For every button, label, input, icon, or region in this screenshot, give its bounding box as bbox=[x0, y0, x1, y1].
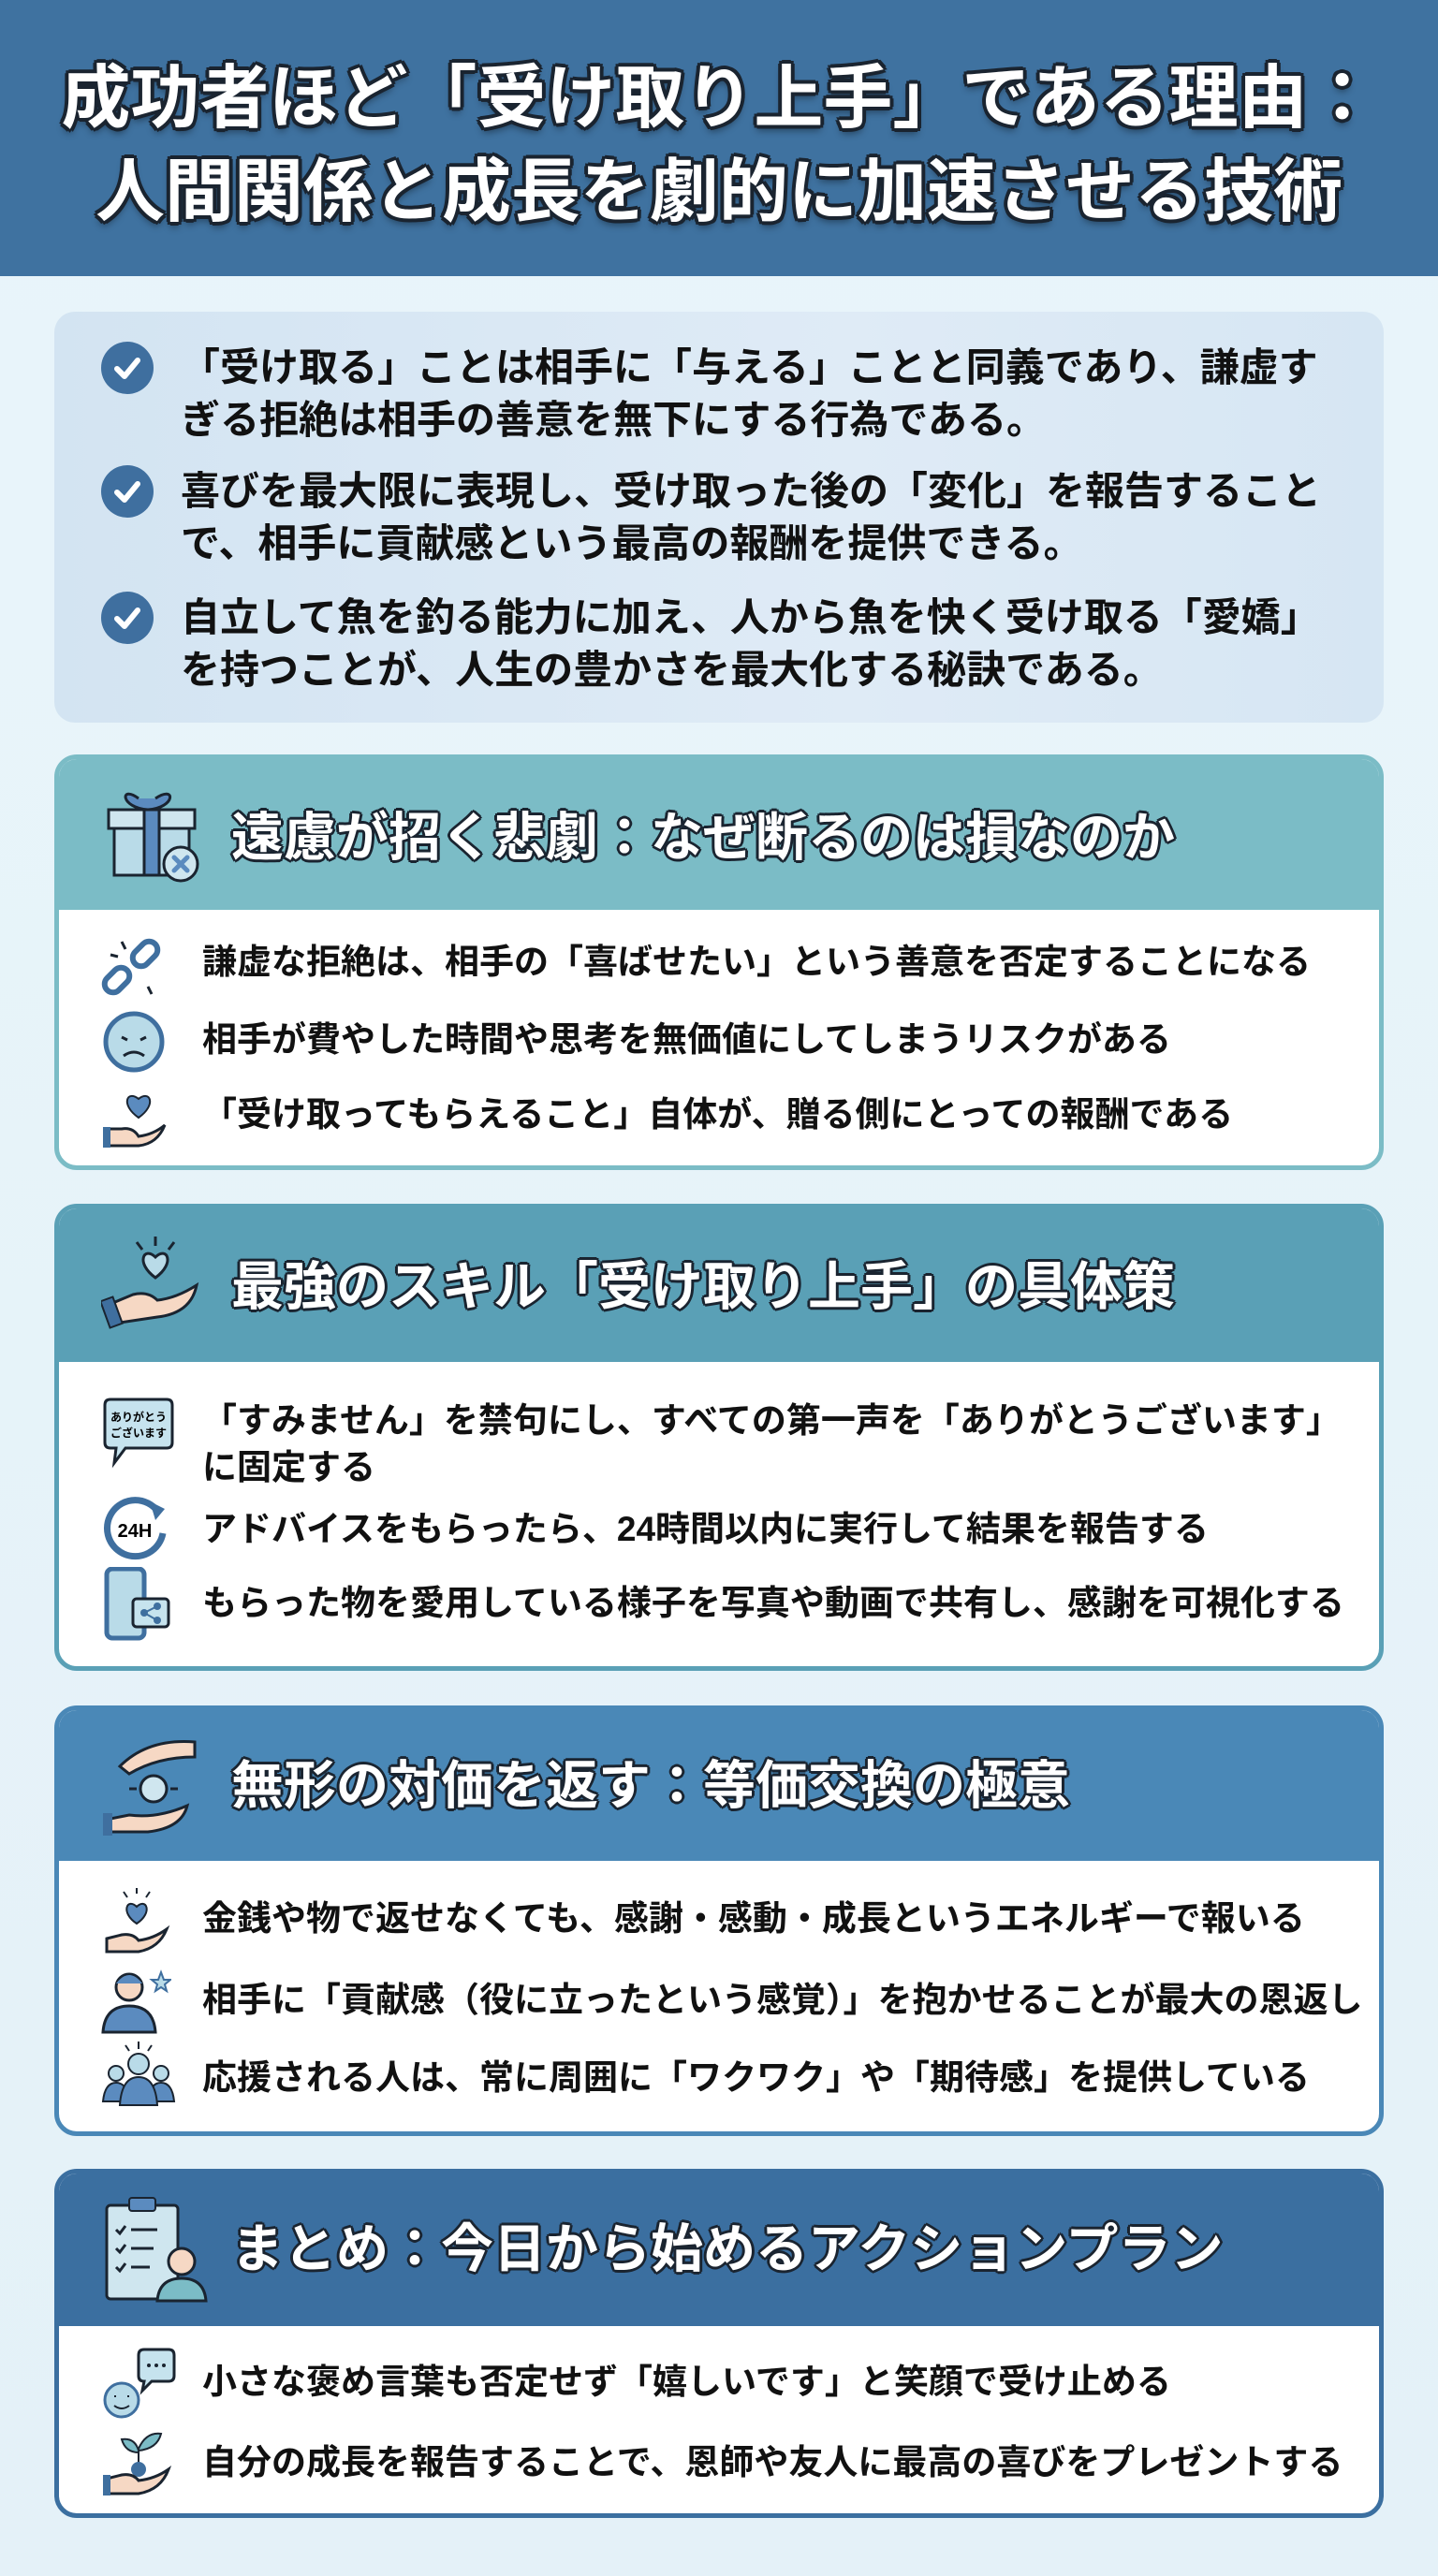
summary point 3 bbox=[181, 595, 1320, 692]
icon: sprout on hand bbox=[103, 2432, 171, 2496]
item 3: 応援される人は、常に周囲に「ワクワク」や「期待感」を提供している bbox=[202, 2058, 1310, 2097]
item 1: 金銭や物で返せなくても、感謝・感動・成長というエネルギーで報いる bbox=[202, 1899, 1305, 1938]
summary point 2 bbox=[181, 469, 1321, 565]
icon: gift with x bbox=[107, 792, 198, 882]
icon: clipboard with person bbox=[105, 2197, 208, 2303]
item 3: 「受け取ってもらえること」自体が、贈る側にとっての報酬である bbox=[202, 1095, 1233, 1134]
icon: speech bubble thanks bbox=[103, 1398, 174, 1468]
panel title: 遠慮が招く悲劇：なぜ断るのは損なのか bbox=[231, 808, 1175, 867]
icon: group of people bbox=[101, 2042, 176, 2106]
check icon 1 bbox=[101, 342, 154, 394]
item 2: 相手に「貢献感（役に立ったという感覚）」を抱かせることが最大の恩返し bbox=[202, 1981, 1363, 2019]
check icon 2 bbox=[101, 465, 154, 518]
icon: broken chain bbox=[101, 938, 161, 996]
summary point 1 bbox=[181, 345, 1318, 442]
icon: smile and speech bubble bbox=[103, 2348, 176, 2419]
summary point 1: ぎる拒絶は相手の善意を無下にする行為である。 bbox=[181, 398, 1046, 442]
item 2: 自分の成長を報告することで、恩師や友人に最高の喜びをプレゼントする bbox=[202, 2443, 1343, 2481]
item 1 bbox=[202, 1401, 1341, 1486]
icon: person with star bbox=[101, 1969, 171, 2033]
summary point 3: を持つことが、人生の豊かさを最大化する秘訣である。 bbox=[181, 648, 1163, 692]
icon: 24h clock bbox=[104, 1497, 167, 1559]
title line 2: 人間関係と成長を劇的に加速させる技術 bbox=[95, 153, 1343, 230]
summary point 3: 自立して魚を釣る能力に加え、人から魚を快く受け取る「愛嬌」 bbox=[181, 595, 1320, 639]
panel title: 無形の対価を返す：等価交換の極意 bbox=[231, 1756, 1070, 1815]
summary point 1: 「受け取る」ことは相手に「与える」ことと同義であり、謙虚す bbox=[181, 345, 1318, 389]
icon: sad face bbox=[103, 1011, 165, 1073]
item 2: アドバイスをもらったら、24時間以内に実行して結果を報告する bbox=[202, 1510, 1209, 1548]
item 1: に固定する bbox=[202, 1448, 375, 1486]
panel: concrete skills bbox=[54, 1204, 1384, 1671]
icon: speech bubble thanks: ありがとう bbox=[110, 1409, 167, 1425]
item 1: 謙虚な拒絶は、相手の「喜ばせたい」という善意を否定することになる bbox=[202, 943, 1311, 981]
panel: summary action plan bbox=[54, 2169, 1384, 2518]
item 3: もらった物を愛用している様子を写真や動画で共有し、感謝を可視化する bbox=[202, 1584, 1344, 1622]
icon: hand heart bbox=[105, 1888, 170, 1953]
header band bbox=[0, 0, 1438, 276]
summary box bbox=[54, 312, 1384, 723]
item 1: 「すみません」を禁句にし、すべての第一声を「ありがとうございます」 bbox=[202, 1401, 1341, 1440]
icon: hand with heart bbox=[101, 1237, 198, 1329]
icon: hands with light bbox=[103, 1740, 197, 1836]
check icon 3 bbox=[101, 592, 154, 644]
icon: heart on hand bbox=[103, 1095, 167, 1148]
panel title: まとめ：今日から始めるアクションプラン bbox=[231, 2219, 1224, 2278]
title line 1: 成功者ほど「受け取り上手」である理由： bbox=[61, 59, 1377, 137]
panel: intangible return bbox=[54, 1705, 1384, 2136]
icon: speech bubble thanks: ございます bbox=[110, 1425, 167, 1441]
icon: 24h clock: 24H bbox=[118, 1521, 152, 1542]
icon: phone share bbox=[105, 1567, 170, 1640]
summary point 2: 喜びを最大限に表現し、受け取った後の「変化」を報告すること bbox=[181, 469, 1321, 513]
summary point 2: で、相手に貢献感という最高の報酬を提供できる。 bbox=[181, 521, 1082, 565]
item 1: 小さな褒め言葉も否定せず「嬉しいです」と笑顔で受け止める bbox=[202, 2363, 1171, 2401]
item 2: 相手が費やした時間や思考を無価値にしてしまうリスクがある bbox=[202, 1020, 1171, 1059]
panel title: 最強のスキル「受け取り上手」の具体策 bbox=[231, 1257, 1175, 1316]
panel: tragedy of modesty bbox=[54, 754, 1384, 1170]
